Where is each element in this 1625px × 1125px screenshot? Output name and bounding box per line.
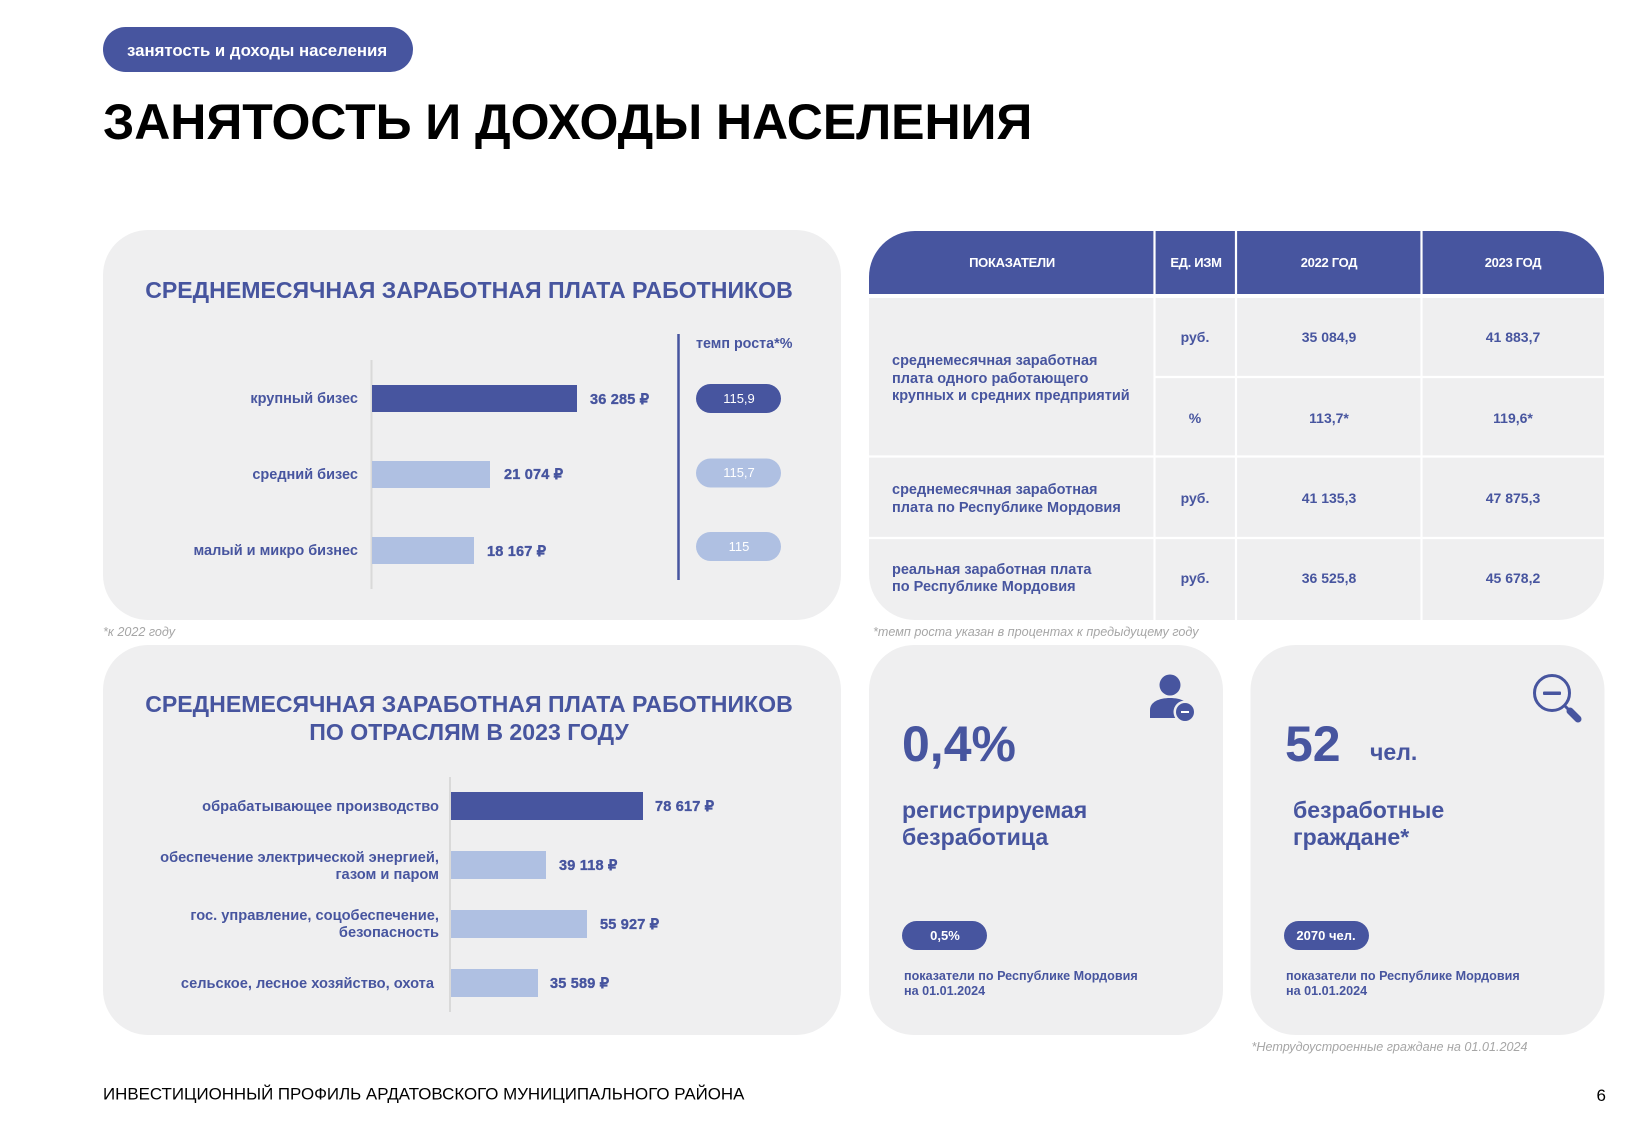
note: Mordovia indicators: на 01.01.2024 [1286,984,1367,998]
row: average salary Mordovia: 47 875,3 [1486,490,1540,506]
title: ЗАНЯТОСТЬ И ДОХОДЫ НАСЕЛЕНИЯ [103,94,1032,150]
pill: 0,5% [902,921,987,950]
row: average salary Mordovia [892,482,1540,516]
table header: ЕД. ИЗМ [1170,255,1222,270]
note: Mordovia indicators [904,969,1138,998]
growth pill: 115,9: 115,9 [723,391,755,406]
bar: agriculture [181,969,610,997]
icon: magnifier minus [1534,676,1578,719]
row: average salary large and medium enterprises: среднемесячная заработная [892,353,1098,369]
row: average salary large and medium enterprises: 41 883,7 [1486,329,1540,345]
metric label: безработица [902,824,1048,850]
panel: indicators table [869,231,1604,620]
row: average salary large and medium enterprises: 35 084,9 [1302,329,1356,345]
row: average salary large and medium enterprises [892,329,1540,426]
bar: public administration: гос. управление, соцобеспечение, [190,908,439,924]
bar: small and micro business [194,537,547,564]
row: average salary large and medium enterprises: 113,7* [1309,410,1349,426]
row: average salary large and medium enterprises: плата одного работающего [892,371,1089,387]
bar: manufacturing: обрабатывающее производство [202,799,439,815]
bar: small and micro business: 18 167 ₽ [487,544,547,560]
bar: medium business: 21 074 ₽ [504,467,564,483]
row: average salary Mordovia: 41 135,3 [1302,490,1356,506]
note: Mordovia indicators: на 01.01.2024 [904,984,985,998]
bar chart: business size [194,360,650,589]
table header: ПОКАЗАТЕЛИ [969,255,1055,270]
footnote: growth rate: *темп роста указан в процентах к предыдущему году [873,625,1199,639]
bar: electricity and gas: газом и паром [335,867,439,883]
bar chart: industries [160,777,715,1012]
footnote: unemployed citizens: *Нетрудоустроенные граждане на 01.01.2024 [1252,1040,1527,1054]
table header [869,231,1604,294]
note: Mordovia indicators [1286,969,1520,998]
row: real salary Mordovia: 36 525,8 [1302,570,1356,586]
row: average salary Mordovia: плата по Республике Мордовия [892,500,1121,516]
growth pill: 115,7: 115,7 [723,465,755,480]
bar: medium business: средний бизес [252,467,358,483]
row: average salary Mordovia: среднемесячная заработная [892,482,1098,498]
row: real salary Mordovia: по Республике Мордовия [892,579,1076,595]
row: average salary Mordovia: руб. [1181,490,1209,506]
bar: electricity and gas: 39 118 ₽ [559,858,618,874]
bar: agriculture: сельское, лесное хозяйство, охота [181,976,435,992]
table body [869,298,1604,620]
bar: public administration [190,908,660,941]
metric label: регистрируемая [902,797,1087,823]
heading: salary by industry: ПО ОТРАСЛЯМ В 2023 ГОДУ [309,719,629,745]
heading: salary by industry [145,691,793,745]
metric unit: чел. [1370,739,1417,765]
page number: 6 [1597,1086,1606,1105]
panel: salary by industry [103,645,841,1035]
growth rate column: темп роста*% [696,336,793,352]
metric label: безработные [1293,797,1444,823]
pill: 2070 people: 2070 чел. [1296,928,1356,943]
growth pill: 115,9 [696,384,781,413]
metric: 52: 52 [1285,716,1341,772]
bar: small and micro business: малый и микро бизнес [194,543,358,559]
row: average salary large and medium enterprises: крупных и средних предприятий [892,388,1130,404]
section tag pill [103,27,413,72]
metric: 0,4%: 0,4% [902,716,1016,772]
bar: manufacturing [202,792,715,820]
bar: agriculture: 35 589 ₽ [550,976,610,992]
growth pill: 115,7 [696,458,781,488]
bar: public administration: 55 927 ₽ [600,917,660,933]
bar: medium business [252,461,564,488]
row: average salary large and medium enterprises: % [1189,410,1202,426]
bar: electricity and gas: обеспечение электрической энергией, [160,850,439,866]
panel: unemployed citizens [1250,645,1604,1035]
growth pill: 115: 115 [729,539,749,554]
row: real salary Mordovia [892,562,1540,595]
row: real salary Mordovia: 45 678,2 [1486,570,1540,586]
bar: electricity and gas [160,850,618,883]
bar: large business: крупный бизес [250,391,358,407]
bar: large business [250,385,650,412]
icon: person minus [1150,674,1196,724]
table header: 2022 ГОД [1301,255,1358,270]
bar: public administration: безопасность [339,925,439,941]
note: Mordovia indicators: показатели по Республике Мордовия [1286,969,1520,983]
row: real salary Mordovia: реальная заработная плата [892,562,1092,578]
heading: salary by business size: СРЕДНЕМЕСЯЧНАЯ ЗАРАБОТНАЯ ПЛАТА РАБОТНИКОВ [145,277,793,303]
section tag pill: занятость и доходы населения [127,41,387,60]
heading: salary by industry: СРЕДНЕМЕСЯЧНАЯ ЗАРАБОТНАЯ ПЛАТА РАБОТНИКОВ [145,691,793,717]
row: real salary Mordovia: руб. [1181,570,1209,586]
metric label: граждане* [1293,824,1409,850]
row: average salary large and medium enterprises: руб. [1181,329,1209,345]
growth pill: 115 [696,532,781,561]
bar: manufacturing: 78 617 ₽ [655,799,715,815]
bar: large business: 36 285 ₽ [590,392,650,408]
metric label [902,797,1087,850]
growth rate column [678,334,793,580]
row: average salary large and medium enterprises: 119,6* [1493,410,1533,426]
table header: 2023 ГОД [1485,255,1542,270]
note: Mordovia indicators: показатели по Республике Мордовия [904,969,1138,983]
metric label [1293,797,1444,850]
panel: registered unemployment [869,645,1223,1035]
panel: salary by business size [103,230,841,620]
pill: 0,5%: 0,5% [930,928,960,943]
pill: 2070 people [1284,921,1369,950]
footnote: to 2022: *к 2022 году [103,625,176,639]
footer text: ИНВЕСТИЦИОННЫЙ ПРОФИЛЬ АРДАТОВСКОГО МУНИЦИПАЛЬНОГО РАЙОНА [103,1084,745,1104]
